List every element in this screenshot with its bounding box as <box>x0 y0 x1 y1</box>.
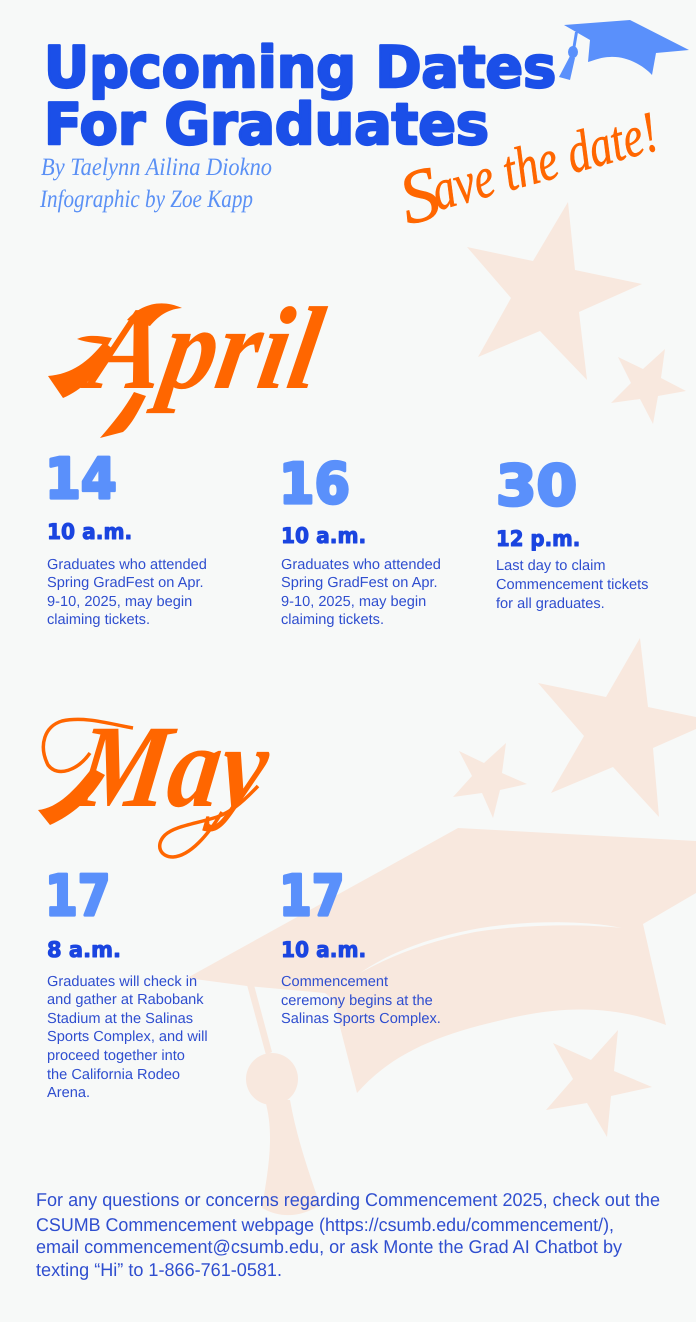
date: April 16 <box>279 452 441 628</box>
date: May 17 10 a.m.: 10 a.m. <box>281 938 366 963</box>
date: April 14: 9-10, 2025, may begin <box>47 594 192 610</box>
date: April 14: 14 <box>45 447 117 512</box>
date: May 17 10 a.m. <box>279 864 441 1027</box>
date: April 30: Last day to claim <box>496 558 606 574</box>
date: May 17 8 a.m.: Stadium at the Salinas <box>47 1011 193 1027</box>
background star: large middle right <box>538 638 696 817</box>
footer contact text: CSUMB Commencement webpage (https://csumb.edu/commencement/), <box>36 1214 614 1235</box>
date: April 14: Spring GradFest on Apr. <box>47 575 204 591</box>
footer contact text: For any questions or concerns regarding Commencement 2025, check out the <box>36 1189 660 1210</box>
title: Upcoming Dates <box>44 35 556 101</box>
background star: large top <box>467 202 642 380</box>
date: April 14: claiming tickets. <box>47 612 150 628</box>
date: April 30 <box>496 454 648 612</box>
date: April 16: 9-10, 2025, may begin <box>281 594 426 610</box>
date: April 16: Spring GradFest on Apr. <box>281 575 438 591</box>
date: May 17 10 a.m.: Commencement <box>281 974 388 990</box>
date: April 16: 16 <box>279 452 350 517</box>
date: May 17 8 a.m.: Arena. <box>47 1085 90 1101</box>
byline: Infographic by Zoe Kapp <box>39 186 253 213</box>
date: April 16: Graduates who attended <box>281 557 441 573</box>
date: May 17 8 a.m.: proceed together into <box>47 1048 185 1064</box>
heading: April: April <box>75 283 333 414</box>
byline: By Taelynn Ailina Diokno <box>41 154 272 181</box>
date: May 17 8 a.m. <box>45 864 208 1101</box>
date: April 30: 30 <box>496 454 577 519</box>
date: April 30: Commencement tickets <box>496 577 648 593</box>
background star: small middle <box>453 743 527 818</box>
heading: May: May <box>67 701 277 832</box>
star near cap <box>546 1030 652 1137</box>
footer contact text <box>36 1189 660 1280</box>
background graduation cap <box>187 828 696 1215</box>
date: May 17 8 a.m.: 8 a.m. <box>47 938 121 963</box>
date: May 17 10 a.m.: ceremony begins at the <box>281 993 433 1009</box>
date: May 17 8 a.m.: and gather at Rabobank <box>47 992 204 1008</box>
date: April 16: 10 a.m. <box>281 524 366 549</box>
date: May 17 8 a.m.: 17 <box>45 864 110 929</box>
date: May 17 8 a.m.: Graduates will check in <box>47 974 197 990</box>
date: April 14 <box>45 447 207 628</box>
date: May 17 10 a.m.: Salinas Sports Complex. <box>281 1011 441 1027</box>
date: April 14: Graduates who attended <box>47 557 207 573</box>
footer contact text: texting “Hi” to 1-866-761-0581. <box>36 1259 282 1280</box>
save the date callout <box>390 90 668 241</box>
byline <box>39 154 272 213</box>
date: April 14: 10 a.m. <box>47 520 132 545</box>
background star: small top right <box>611 349 686 424</box>
heading: May <box>38 701 277 857</box>
title: For Graduates <box>44 92 489 158</box>
save the date callout: S <box>390 150 449 241</box>
date: May 17 10 a.m.: 17 <box>279 864 344 929</box>
date: April 16: claiming tickets. <box>281 612 384 628</box>
date: May 17 8 a.m.: Sports Complex, and will <box>47 1029 208 1045</box>
icon: blue graduation cap <box>559 20 689 80</box>
title <box>44 35 556 158</box>
date: April 30: 12 p.m. <box>496 527 580 552</box>
date: April 30: for all graduates. <box>496 596 605 612</box>
footer contact text: email commencement@csumb.edu, or ask Monte the Grad AI Chatbot by <box>36 1236 623 1257</box>
date: May 17 8 a.m.: the California Rodeo <box>47 1067 180 1083</box>
